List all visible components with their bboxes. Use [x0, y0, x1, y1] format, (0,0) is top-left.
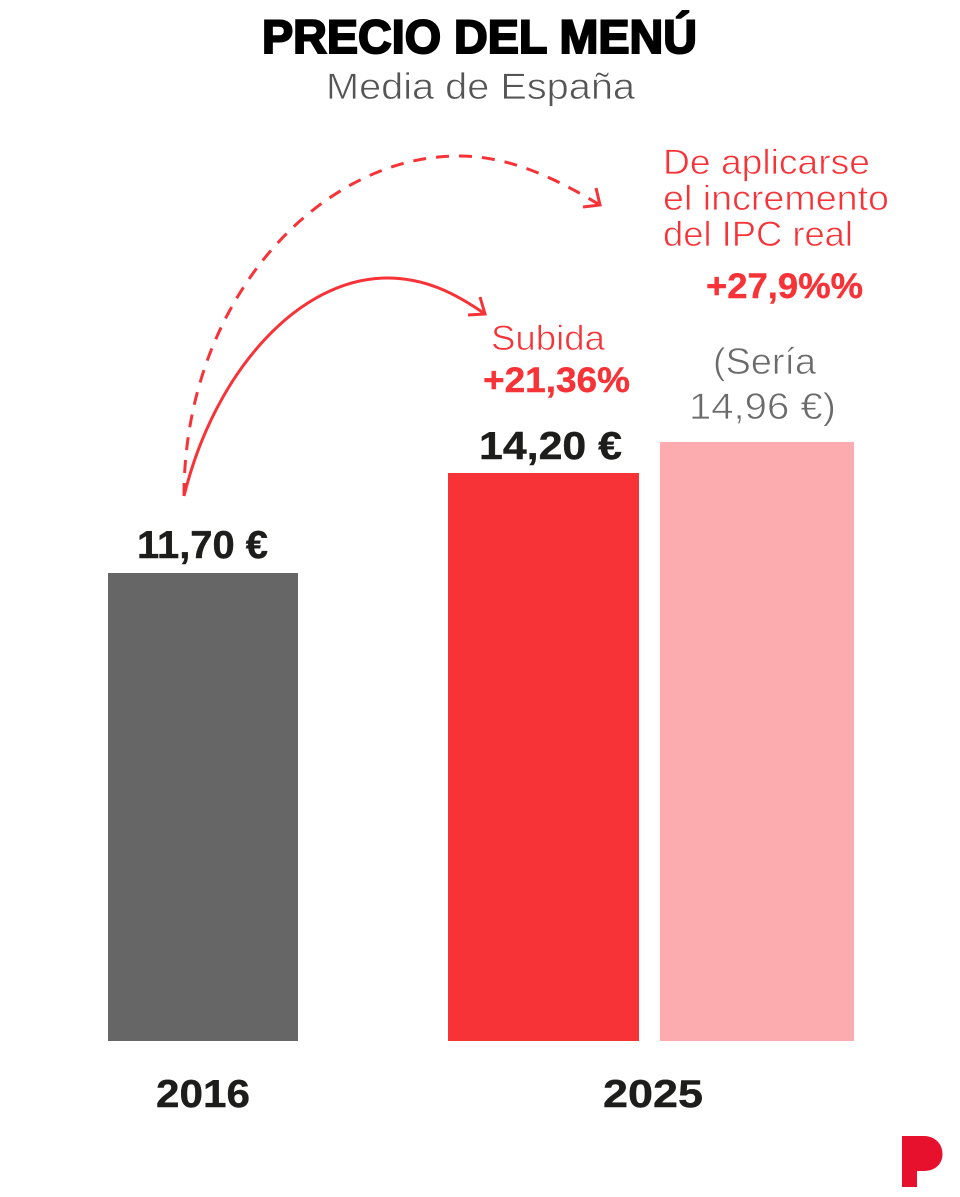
- title: PRECIO DEL MENÚ: [262, 10, 697, 63]
- axis label: 2025: 2025: [603, 1073, 703, 1116]
- subtitle: Media de España: [326, 66, 635, 107]
- annotation: subida: Subida: [491, 319, 606, 358]
- value: 2016: 11,70 €: [137, 524, 268, 567]
- arrow: dashed IPC increase: [184, 156, 600, 496]
- annotation: IPC real: el incremento: [663, 179, 889, 218]
- annotation: IPC real: De aplicarse: [663, 143, 870, 182]
- arrow: solid actual increase: [184, 278, 485, 496]
- logo: [902, 1136, 942, 1187]
- annotation: sería: (Sería: [713, 341, 816, 382]
- bar: 2025 with IPC: [660, 442, 854, 1041]
- value: +27,9%: +27,9%%: [706, 267, 863, 306]
- value: 2025: 14,20 €: [479, 425, 622, 468]
- value: +21,36%: +21,36%: [483, 361, 630, 400]
- annotation: sería: [689, 341, 836, 427]
- annotation: IPC real: [663, 143, 889, 254]
- axis label: 2016: 2016: [156, 1073, 250, 1116]
- bar: 2025 actual: [448, 473, 639, 1041]
- annotation: sería: 14,96 €): [689, 386, 836, 427]
- annotation: IPC real: del IPC real: [663, 215, 853, 254]
- bar: 2016: [108, 573, 298, 1041]
